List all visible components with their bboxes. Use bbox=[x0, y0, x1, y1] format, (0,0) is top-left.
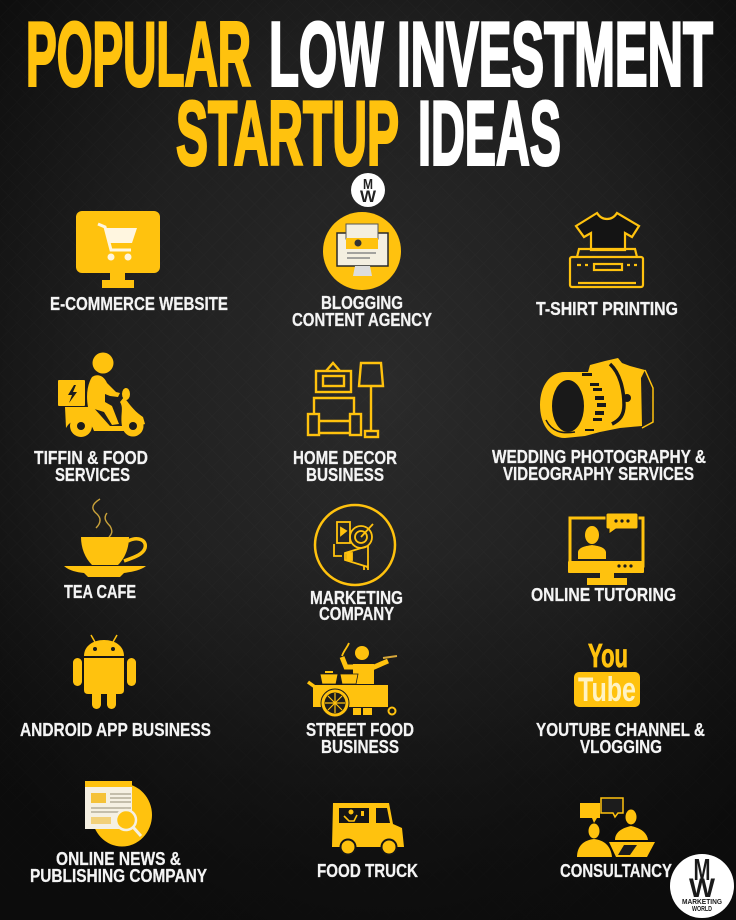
icon: android robot bbox=[73, 635, 136, 709]
icon: monitor with shopping cart bbox=[76, 211, 160, 288]
panel: blogging content agency bbox=[292, 212, 432, 330]
title: POPULAR bbox=[26, 4, 251, 106]
label: TEA CAFE bbox=[64, 582, 136, 602]
label: BUSINESS bbox=[306, 465, 384, 485]
label: VLOGGING bbox=[580, 737, 662, 757]
label: HOME DECOR bbox=[293, 448, 397, 468]
icon: newspaper with magnifier bbox=[85, 781, 152, 846]
icon: marketing circle bbox=[315, 505, 395, 585]
brand logo: marketing world: WORLD bbox=[692, 906, 712, 913]
icon: youtube logo: You bbox=[588, 637, 628, 674]
panel: android app business bbox=[20, 635, 211, 740]
icon: street food cart bbox=[308, 643, 397, 717]
small brand logo: M bbox=[363, 176, 373, 193]
icon: food truck bbox=[332, 803, 404, 856]
label: WEDDING PHOTOGRAPHY & bbox=[492, 447, 706, 467]
label: STREET FOOD bbox=[306, 720, 414, 740]
label: MARKETING bbox=[310, 588, 403, 608]
small brand logo: W bbox=[360, 187, 377, 206]
icon: camera bbox=[540, 358, 653, 438]
icon: lamp, picture frame and armchair bbox=[308, 363, 383, 437]
title: IDEAS bbox=[418, 84, 561, 184]
label: T-SHIRT PRINTING bbox=[536, 299, 678, 319]
panel: online tutoring bbox=[531, 513, 676, 605]
label: E-COMMERCE WEBSITE bbox=[50, 294, 228, 314]
label: TIFFIN & FOOD bbox=[34, 448, 148, 468]
title: STARTUP bbox=[176, 84, 399, 184]
icon: delivery scooter bbox=[58, 352, 145, 437]
panel: tiffin and food services bbox=[34, 352, 148, 485]
panel: youtube channel and vlogging bbox=[536, 637, 705, 757]
panel: t-shirt printing bbox=[536, 213, 678, 319]
label bbox=[30, 849, 207, 886]
label: ONLINE NEWS & bbox=[56, 849, 181, 869]
label bbox=[536, 720, 705, 757]
panel: home decor business bbox=[293, 363, 397, 485]
label: BUSINESS bbox=[321, 737, 399, 757]
panel: online news and publishing company bbox=[30, 781, 207, 886]
label bbox=[310, 588, 403, 624]
panel: tea cafe bbox=[64, 499, 146, 602]
panel: wedding photography and videography services bbox=[492, 358, 706, 484]
icon: t-shirt and printer bbox=[570, 213, 643, 287]
brand logo: marketing world: MARKETING bbox=[682, 899, 723, 906]
title bbox=[26, 4, 713, 184]
icon: youtube logo bbox=[574, 637, 640, 709]
label: BLOGGING bbox=[321, 293, 403, 313]
label: CONTENT AGENCY bbox=[292, 310, 432, 330]
label: ANDROID APP BUSINESS bbox=[20, 720, 211, 740]
panel: consultancy bbox=[560, 798, 672, 881]
label: VIDEOGRAPHY SERVICES bbox=[503, 464, 694, 484]
icon: blog monitor in circle bbox=[323, 212, 401, 290]
panel: marketing company bbox=[310, 505, 403, 624]
label bbox=[492, 447, 706, 484]
panel: food truck bbox=[317, 803, 418, 881]
icon: steaming tea cup bbox=[64, 499, 146, 577]
label bbox=[292, 293, 432, 330]
label: COMPANY bbox=[319, 604, 394, 624]
icon: video tutoring monitor bbox=[568, 513, 644, 585]
brand logo: marketing world bbox=[670, 852, 734, 918]
brand logo: marketing world: M bbox=[694, 852, 710, 887]
label: PUBLISHING COMPANY bbox=[30, 866, 207, 886]
label bbox=[306, 720, 414, 757]
icon: youtube logo: Tube bbox=[578, 671, 636, 709]
label: ONLINE TUTORING bbox=[531, 585, 676, 605]
label bbox=[293, 448, 397, 485]
label bbox=[34, 448, 148, 485]
label: CONSULTANCY bbox=[560, 861, 672, 881]
icon: two people consulting bbox=[577, 798, 655, 857]
panel: e-commerce website bbox=[50, 211, 228, 314]
panel: street food business bbox=[306, 643, 414, 757]
label: SERVICES bbox=[55, 465, 130, 485]
small brand logo bbox=[351, 173, 385, 207]
label: FOOD TRUCK bbox=[317, 861, 418, 881]
label: YOUTUBE CHANNEL & bbox=[536, 720, 705, 740]
brand logo: marketing world: W bbox=[689, 873, 716, 903]
